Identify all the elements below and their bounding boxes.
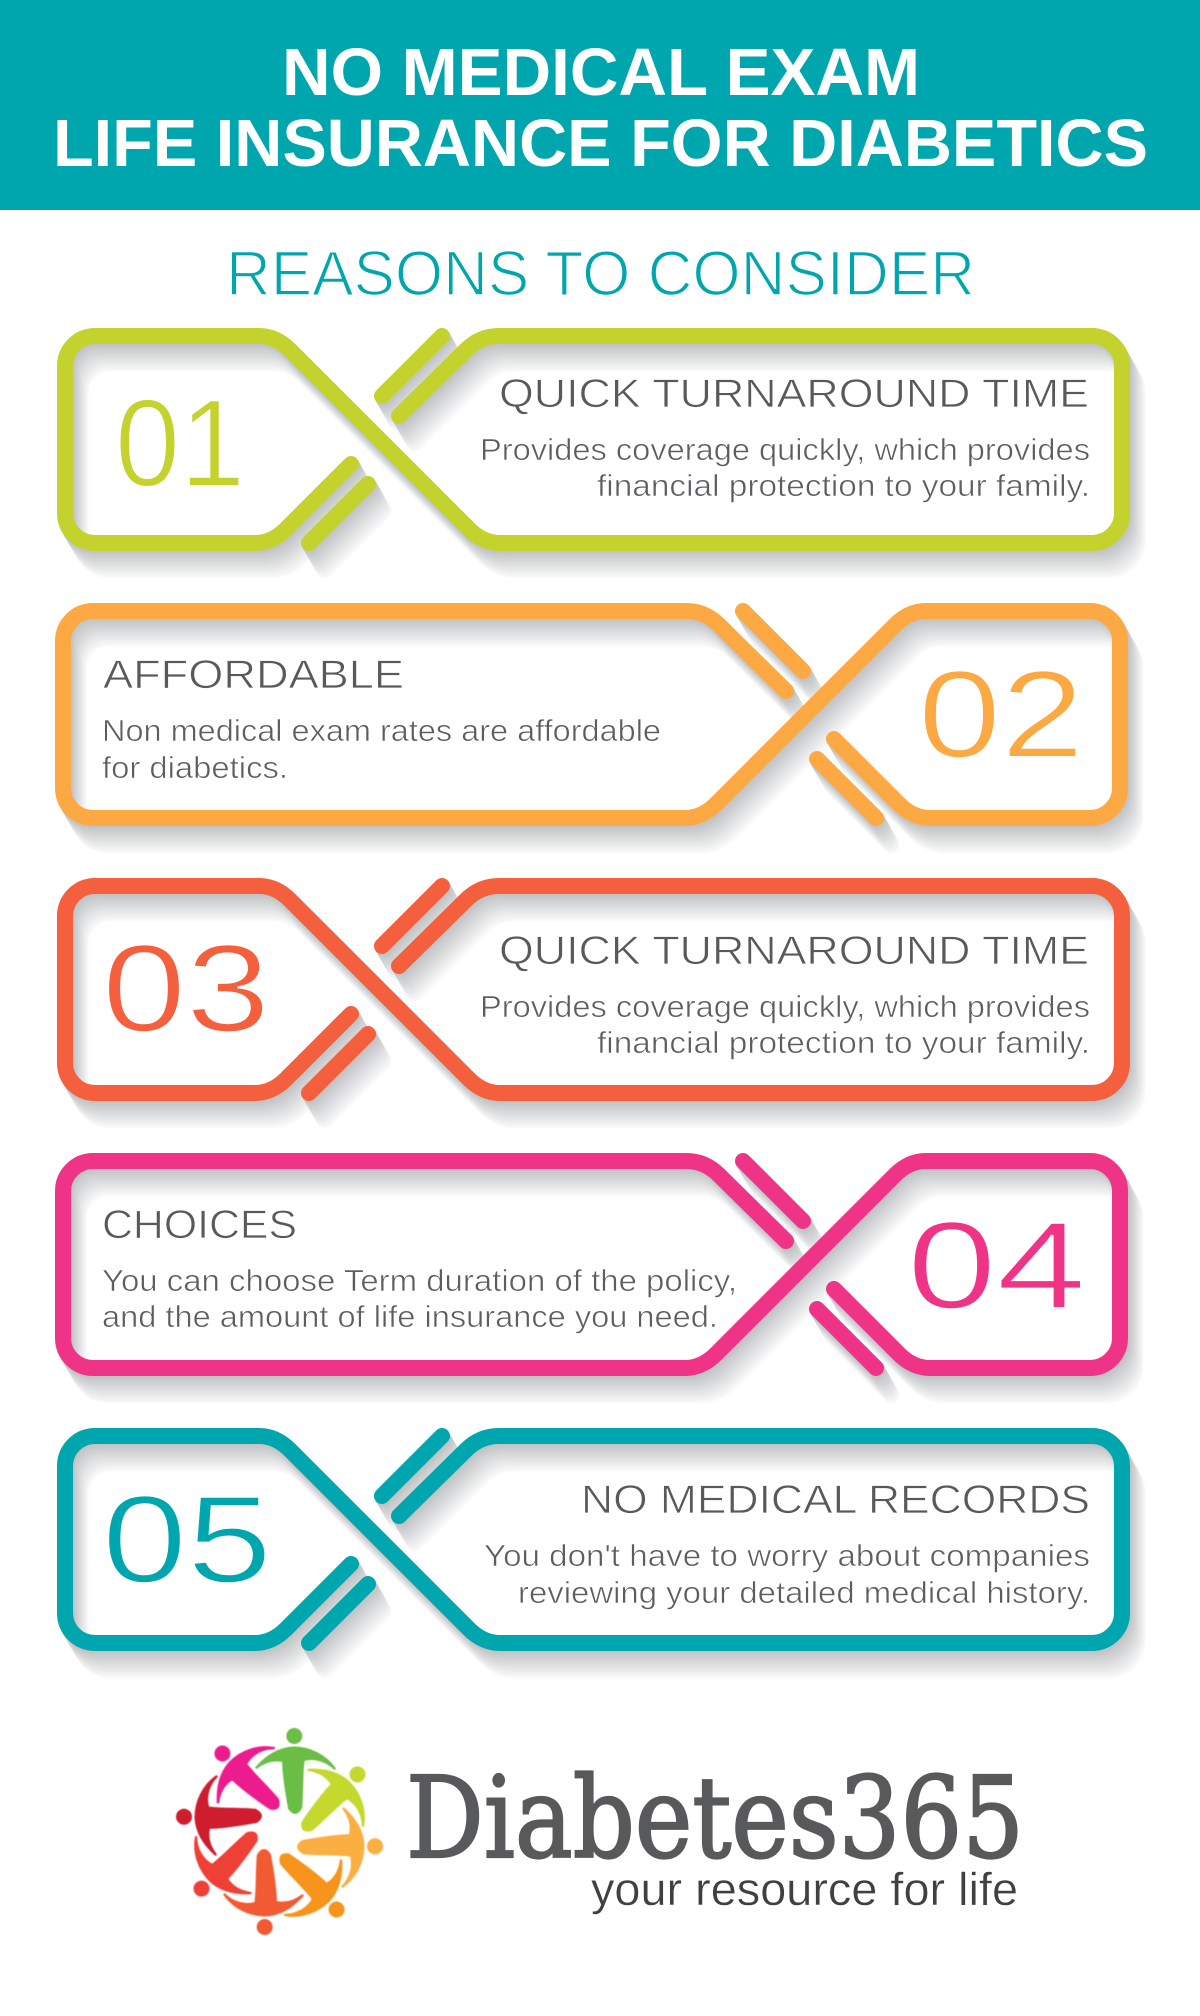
panel: 02 affordable [63, 611, 1136, 845]
body text: You don't have to worry about companies [484, 1538, 1090, 1573]
title: LIFE INSURANCE FOR DIABETICS [53, 106, 1148, 181]
wordmark: Diabetes365 [406, 1754, 1024, 1884]
heading: QUICK TURNAROUND TIME [499, 929, 1089, 973]
body text: reviewing your detailed medical history. [518, 1575, 1090, 1610]
frame shadow [66, 338, 1138, 570]
title [53, 35, 1148, 181]
frame [65, 886, 1122, 1093]
body text: and the amount of life insurance you need. [102, 1299, 718, 1334]
number 02: 02 [918, 646, 1084, 784]
frame [65, 336, 1122, 543]
frame [65, 1436, 1122, 1643]
frame shadow [64, 613, 1136, 845]
heading: NO MEDICAL RECORDS [581, 1478, 1090, 1522]
frame shadow [66, 888, 1138, 1120]
frame [63, 611, 1120, 818]
body text: Provides coverage quickly, which provides [480, 989, 1090, 1024]
body text: Non medical exam rates are affordable [102, 713, 661, 748]
heading: QUICK TURNAROUND TIME [499, 372, 1089, 416]
title: NO MEDICAL EXAM [282, 35, 920, 110]
body text [480, 432, 1090, 503]
number 01: 01 [115, 375, 245, 513]
number 05: 05 [102, 1471, 272, 1609]
body text [102, 1263, 737, 1334]
body text [480, 989, 1090, 1060]
header banner [0, 0, 1200, 210]
body text: for diabetics. [102, 750, 288, 785]
body text: You can choose Term duration of the policy, [102, 1263, 737, 1298]
icon: circle of people [168, 1720, 391, 1943]
body text: Provides coverage quickly, which provides [480, 432, 1090, 467]
panel: 01 quick turnaround time [65, 336, 1138, 570]
number 03: 03 [102, 920, 270, 1058]
heading: CHOICES [102, 1203, 297, 1247]
panel: 03 quick turnaround time [65, 886, 1138, 1120]
frame [63, 1161, 1120, 1368]
panel: 04 choices [63, 1161, 1136, 1395]
heading: AFFORDABLE [103, 653, 404, 697]
body text: financial protection to your family. [597, 468, 1090, 503]
body text [484, 1538, 1090, 1610]
number 04: 04 [907, 1197, 1086, 1335]
logo: Diabetes365 [168, 1720, 1024, 1943]
frame shadow [64, 1163, 1136, 1395]
frame shadow [66, 1438, 1138, 1670]
tagline: your resource for life [591, 1863, 1018, 1915]
panel: 05 no medical records [65, 1436, 1138, 1670]
body text: financial protection to your family. [597, 1025, 1090, 1060]
body text [102, 713, 661, 785]
subheading: REASONS TO CONSIDER [226, 239, 975, 309]
